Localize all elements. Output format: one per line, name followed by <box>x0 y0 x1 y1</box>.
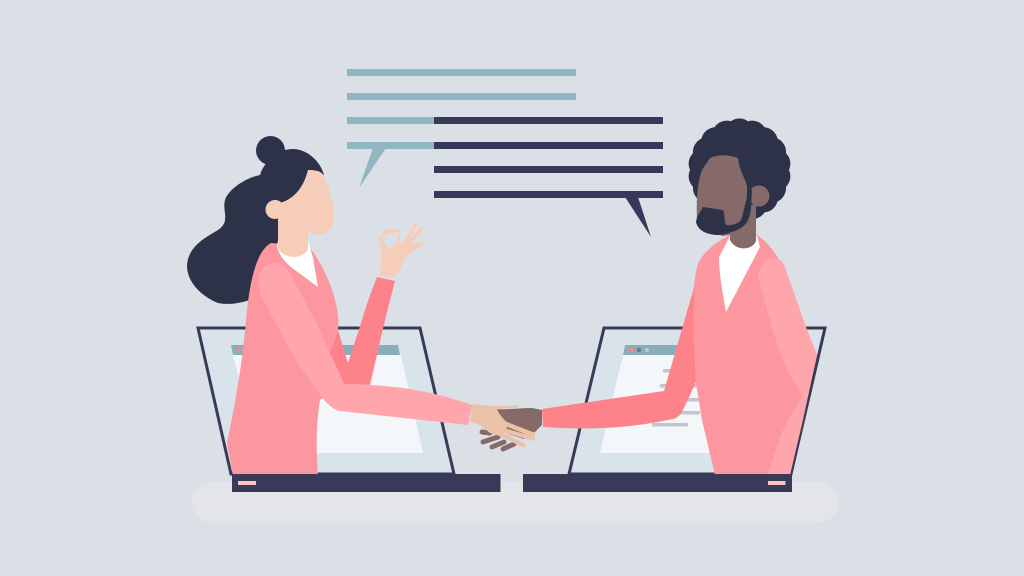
woman neck and face <box>266 170 334 257</box>
dark fingers behind <box>482 432 514 449</box>
man hair afro <box>689 119 790 221</box>
speech bubble lines: woman <box>347 69 576 188</box>
man torso <box>693 235 817 475</box>
woman hand <box>470 404 533 445</box>
man hand <box>497 408 542 439</box>
woman torso <box>227 243 344 475</box>
right laptop screen <box>569 328 825 474</box>
right laptop base <box>523 474 792 492</box>
man neck and face <box>697 155 770 248</box>
man <box>542 119 817 475</box>
woman sleeve <box>259 263 472 425</box>
man sleeve far side <box>758 258 817 475</box>
man arm <box>542 284 696 428</box>
man shirt <box>719 236 760 312</box>
woman hand ok sign <box>379 223 424 278</box>
man beard <box>696 185 752 235</box>
handshake <box>470 404 542 449</box>
woman hair <box>187 136 324 304</box>
woman back arm <box>330 277 395 385</box>
speech bubble lines: man <box>434 117 663 237</box>
woman <box>187 136 472 475</box>
left laptop screen <box>198 328 454 474</box>
table <box>192 482 838 523</box>
woman shirt collar <box>277 240 318 287</box>
left laptop base <box>232 474 500 492</box>
